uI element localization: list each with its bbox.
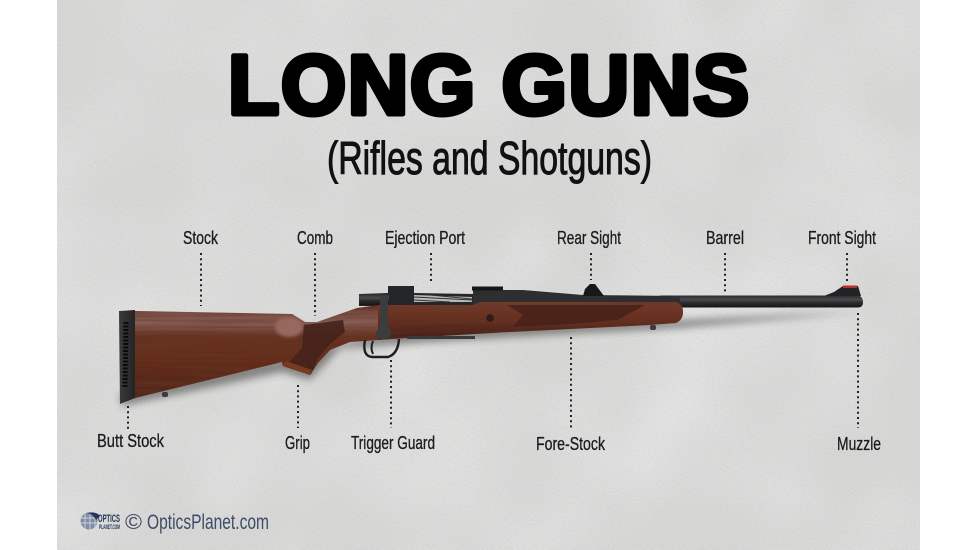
logo sub-wordmark: PLANET.COM [99,525,120,531]
receiver and action [359,284,680,306]
copyright symbol: © [125,511,143,534]
subtitle: (Rifles and Shotguns) [327,132,652,184]
label: Trigger Guard [351,360,435,453]
label: Comb: Comb [297,228,333,248]
label: Comb [297,228,333,316]
title: LONG GUNS [228,38,749,132]
label: Stock [183,228,219,306]
label: Rear Sight: Rear Sight [557,228,621,248]
fore-stock wood [378,300,684,342]
label: Front Sight [808,228,876,284]
logo wordmark: OPTICS [98,513,120,525]
butt stock wood [130,305,380,400]
label: Grip: Grip [285,433,310,453]
trigger guard and band [364,296,399,357]
barrel [660,286,863,308]
label: Stock: Stock [183,228,219,248]
label: Ejection Port: Ejection Port [385,228,465,248]
label: Muzzle: Muzzle [837,434,881,454]
label: Barrel: Barrel [706,228,744,248]
label: Fore-Stock [536,337,606,454]
label: Fore-Stock: Fore-Stock [536,434,606,454]
label: Grip [285,385,310,453]
label: Front Sight: Front Sight [808,228,876,248]
label: Ejection Port [385,228,465,284]
label: Butt Stock: Butt Stock [97,431,165,451]
rifle [119,284,863,406]
rifle shadow [120,312,860,406]
label: Barrel [706,228,744,292]
icon: OpticsPlanet globe [80,512,100,530]
label: Trigger Guard: Trigger Guard [351,433,435,453]
label: Butt Stock [97,406,165,451]
label: Rear Sight [557,228,621,280]
copyright text: OpticsPlanet.com [147,511,269,534]
butt pad [119,310,135,404]
footer logo and copyright [80,511,269,534]
